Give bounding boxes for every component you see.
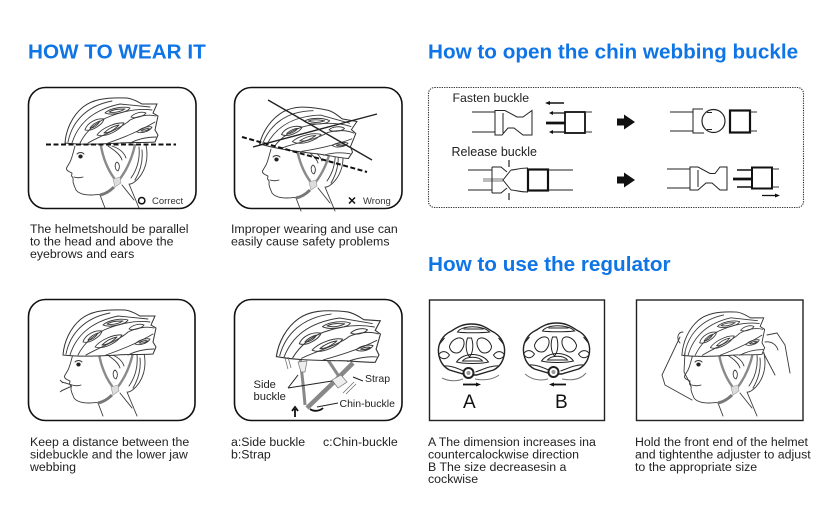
icon: wrong cross: [349, 198, 355, 204]
crossing lines: [253, 100, 377, 160]
dashed tilted line: [242, 137, 367, 172]
icon: arrow fasten: [617, 114, 635, 130]
heading: regulator: How to use the regulator: [428, 253, 671, 276]
caption: tighten instructions: to the appropriate size: [635, 460, 757, 474]
panel: buckle instructions: [428, 88, 804, 208]
label: release buckle: Release buckle: [452, 145, 537, 159]
caption: distance: Keep a distance between the: [30, 435, 189, 449]
caption: distance: webbing: [29, 460, 76, 474]
pointer lines: [288, 375, 363, 407]
illustration: helmet parallel on head: [65, 98, 158, 208]
diagram: open buckle pair: [472, 101, 592, 135]
label: chin-buckle: Chin-buckle: [340, 398, 395, 410]
caption: correct wearing: to the head and above the: [30, 234, 174, 248]
caption: wrong wearing: easily cause safety problems: [231, 234, 390, 248]
caption: regulator directions: A The dimension increases ina: [428, 435, 596, 449]
caption: regulator directions: cockwise: [428, 472, 478, 486]
caption: parts legend: a:Side buckle: [231, 435, 305, 449]
breath marks: [60, 380, 72, 392]
label: wrong: Wrong: [363, 196, 391, 207]
illustration: rear helmet A: [438, 324, 505, 386]
caption: parts legend: c:Chin-buckle: [323, 435, 398, 449]
icon: correct circle: [138, 198, 145, 204]
label: side buckle: buckle: [254, 391, 286, 403]
panel: regulator A and B: [430, 300, 604, 420]
caption: wrong wearing: Improper wearing and use can: [231, 222, 398, 236]
panel: distance from jaw: [28, 300, 195, 420]
panel: helmet parts: [234, 300, 402, 420]
caption: tighten instructions: and tightenthe adjuster to adjust: [635, 448, 811, 462]
label: A: A: [463, 392, 476, 413]
caption: correct wearing: The helmetshould be parallel: [30, 222, 189, 236]
caption: parts legend: b:Strap: [231, 448, 271, 462]
icon: chin buckle arrows: [292, 407, 323, 417]
illustration: rear helmet B: [523, 323, 590, 386]
label: strap: Strap: [365, 373, 390, 385]
illustration: helmet with straps: [276, 307, 382, 408]
label: correct: Correct: [152, 196, 184, 207]
panel: tightening adjuster: [636, 300, 803, 420]
panel: correct wearing: [28, 88, 196, 208]
heading: chin webbing buckle: How to open the chin webbing buckle: [428, 40, 798, 64]
caption: regulator directions: countercalockwise direction: [428, 448, 579, 462]
label: B: B: [555, 392, 568, 413]
diagram: pressed buckle: [468, 160, 573, 200]
caption: tighten instructions: Hold the front end of the helmet: [635, 435, 808, 449]
label: fasten buckle: Fasten buckle: [452, 91, 529, 105]
illustration: hands adjusting helmet: [662, 312, 790, 416]
caption: correct wearing: eyebrows and ears: [30, 247, 134, 261]
illustration: tilted helmet on head: [259, 99, 359, 211]
diagram: released buckle: [667, 167, 780, 198]
icon: arrow release: [617, 172, 635, 188]
panel: wrong wearing: [234, 88, 402, 211]
heading: how to wear it: HOW TO WEAR IT: [28, 40, 206, 64]
label: side buckle: Side: [254, 379, 276, 391]
illustration: head with helmet and breath: [63, 310, 156, 416]
diagram: fastened buckle: [670, 109, 757, 133]
caption: distance: sidebuckle and the lower jaw: [30, 448, 188, 462]
caption: regulator directions: B The size decreasesin a: [428, 460, 567, 474]
dashed level line: [46, 144, 176, 146]
